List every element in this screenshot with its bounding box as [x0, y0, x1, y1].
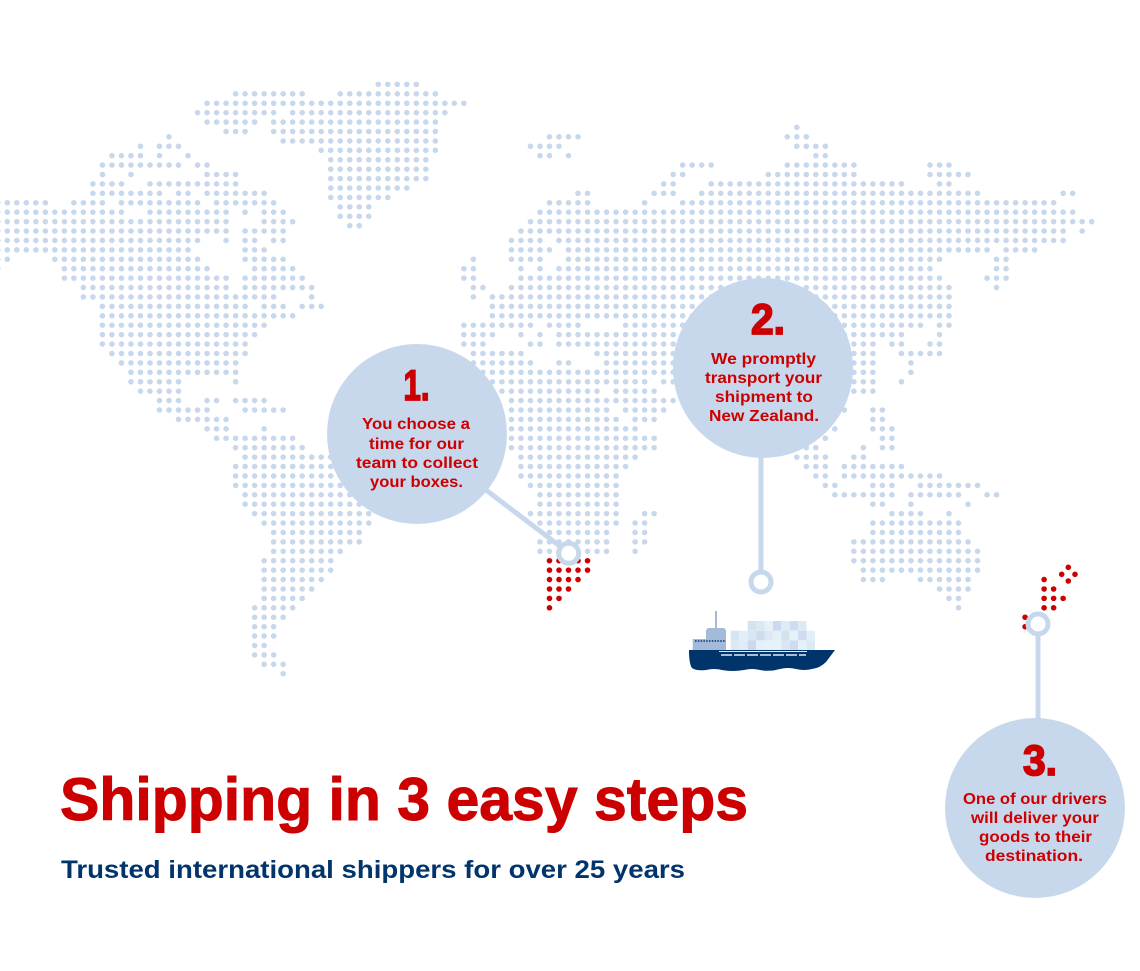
ship cabin windows	[695, 640, 726, 642]
step 3 connector and pin	[1028, 614, 1048, 725]
map: South Africa highlighted dots	[549, 561, 588, 608]
step 2 description: transport your	[705, 370, 822, 387]
subtitle: Trusted international shippers for over 25 years	[61, 856, 685, 884]
step 2 description: New Zealand.	[709, 408, 819, 425]
step 1 description: time for our	[369, 436, 464, 453]
ship bridge	[693, 628, 726, 650]
step 2 bubble	[673, 278, 853, 458]
map: Americas dots	[0, 137, 370, 674]
ship deck rails	[719, 652, 807, 655]
ship containers	[731, 621, 815, 650]
ship mast	[715, 611, 717, 629]
step 1 bubble	[327, 344, 507, 524]
step 1 number: 1.	[404, 362, 430, 410]
step 1 description: You choose a	[362, 416, 470, 433]
step 3 description: One of our drivers	[963, 791, 1107, 808]
step 1 description: your boxes.	[370, 474, 463, 491]
dotted world map	[0, 84, 1093, 674]
ship hull	[689, 650, 835, 671]
map: Greenland dots	[198, 84, 465, 226]
step 2 description: We promptly	[711, 351, 816, 368]
step 3 bubble	[945, 718, 1125, 898]
step 2 connector and pin	[751, 450, 771, 592]
map: New Zealand highlighted dots	[1025, 580, 1064, 627]
title: Shipping in 3 easy steps	[60, 766, 748, 833]
step 2 number: 2.	[751, 296, 785, 344]
step 3 description: goods to their	[979, 829, 1092, 846]
step 1 connector and pin	[486, 490, 579, 563]
step 3 description	[963, 791, 1107, 865]
step 3 description: destination.	[985, 848, 1083, 865]
step 2 description: shipment to	[715, 389, 813, 406]
map: Europe, Africa and Asia dots	[464, 127, 1093, 608]
step 3 description: will deliver your	[970, 810, 1099, 827]
step 3 number: 3.	[1023, 737, 1057, 785]
map: Pacific island highlighted dots	[1059, 564, 1078, 584]
step 2 description	[705, 351, 822, 425]
icon: container ship	[689, 611, 835, 671]
step 1 description: team to collect	[356, 455, 479, 472]
step 1 description	[356, 416, 479, 491]
